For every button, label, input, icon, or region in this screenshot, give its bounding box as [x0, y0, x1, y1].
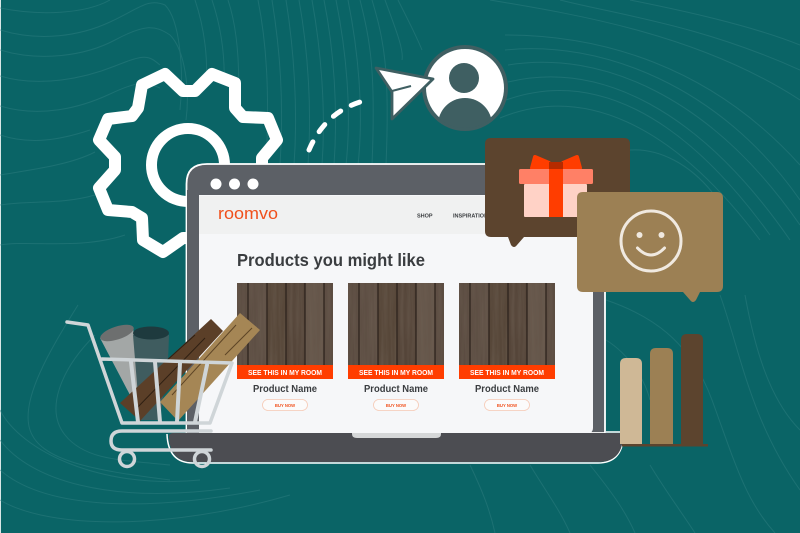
- laptop: [167, 164, 624, 463]
- product card 1: Product Name: [253, 384, 317, 395]
- icon: paper plane: [376, 68, 433, 119]
- icon: gear: [99, 74, 277, 252]
- browser dots: [210, 178, 258, 190]
- logo: roomvo: [218, 204, 278, 223]
- product card 1: SEE THIS IN MY ROOM: [248, 370, 322, 377]
- icon: gift: [519, 157, 593, 217]
- laptop lid: [186, 164, 605, 433]
- left bezel: [187, 190, 199, 433]
- product card 1: BUY NOW: [275, 403, 295, 408]
- icon: user avatar: [422, 45, 508, 131]
- planks: [120, 313, 260, 421]
- product card 3: BUY NOW: [497, 403, 517, 408]
- product card 3: SEE THIS IN MY ROOM: [470, 370, 544, 377]
- product card 3: [459, 283, 555, 410]
- nav: SHOP: [417, 214, 433, 220]
- laptop base: [167, 432, 624, 463]
- product card 2: BUY NOW: [386, 403, 406, 408]
- heading: Products you might like: [237, 250, 425, 270]
- product card 2: SEE THIS IN MY ROOM: [359, 370, 433, 377]
- cart frame: [67, 322, 232, 466]
- product card 1: [237, 283, 333, 410]
- product card 2: Product Name: [364, 384, 428, 395]
- site header: [199, 196, 593, 234]
- rolls: [98, 321, 169, 420]
- screen: [199, 195, 593, 433]
- speech bubble: gift: [485, 138, 630, 247]
- bar chart: [620, 334, 708, 446]
- shopping cart: [67, 313, 260, 466]
- icon: smiley: [621, 211, 681, 271]
- laptop notch: [352, 433, 441, 438]
- product card 3: Product Name: [475, 384, 539, 395]
- site header: INSPIRATION: [453, 214, 488, 220]
- arrow: dashed path: [309, 100, 367, 150]
- speech bubble: smiley: [577, 192, 723, 302]
- product card 2: [348, 283, 444, 410]
